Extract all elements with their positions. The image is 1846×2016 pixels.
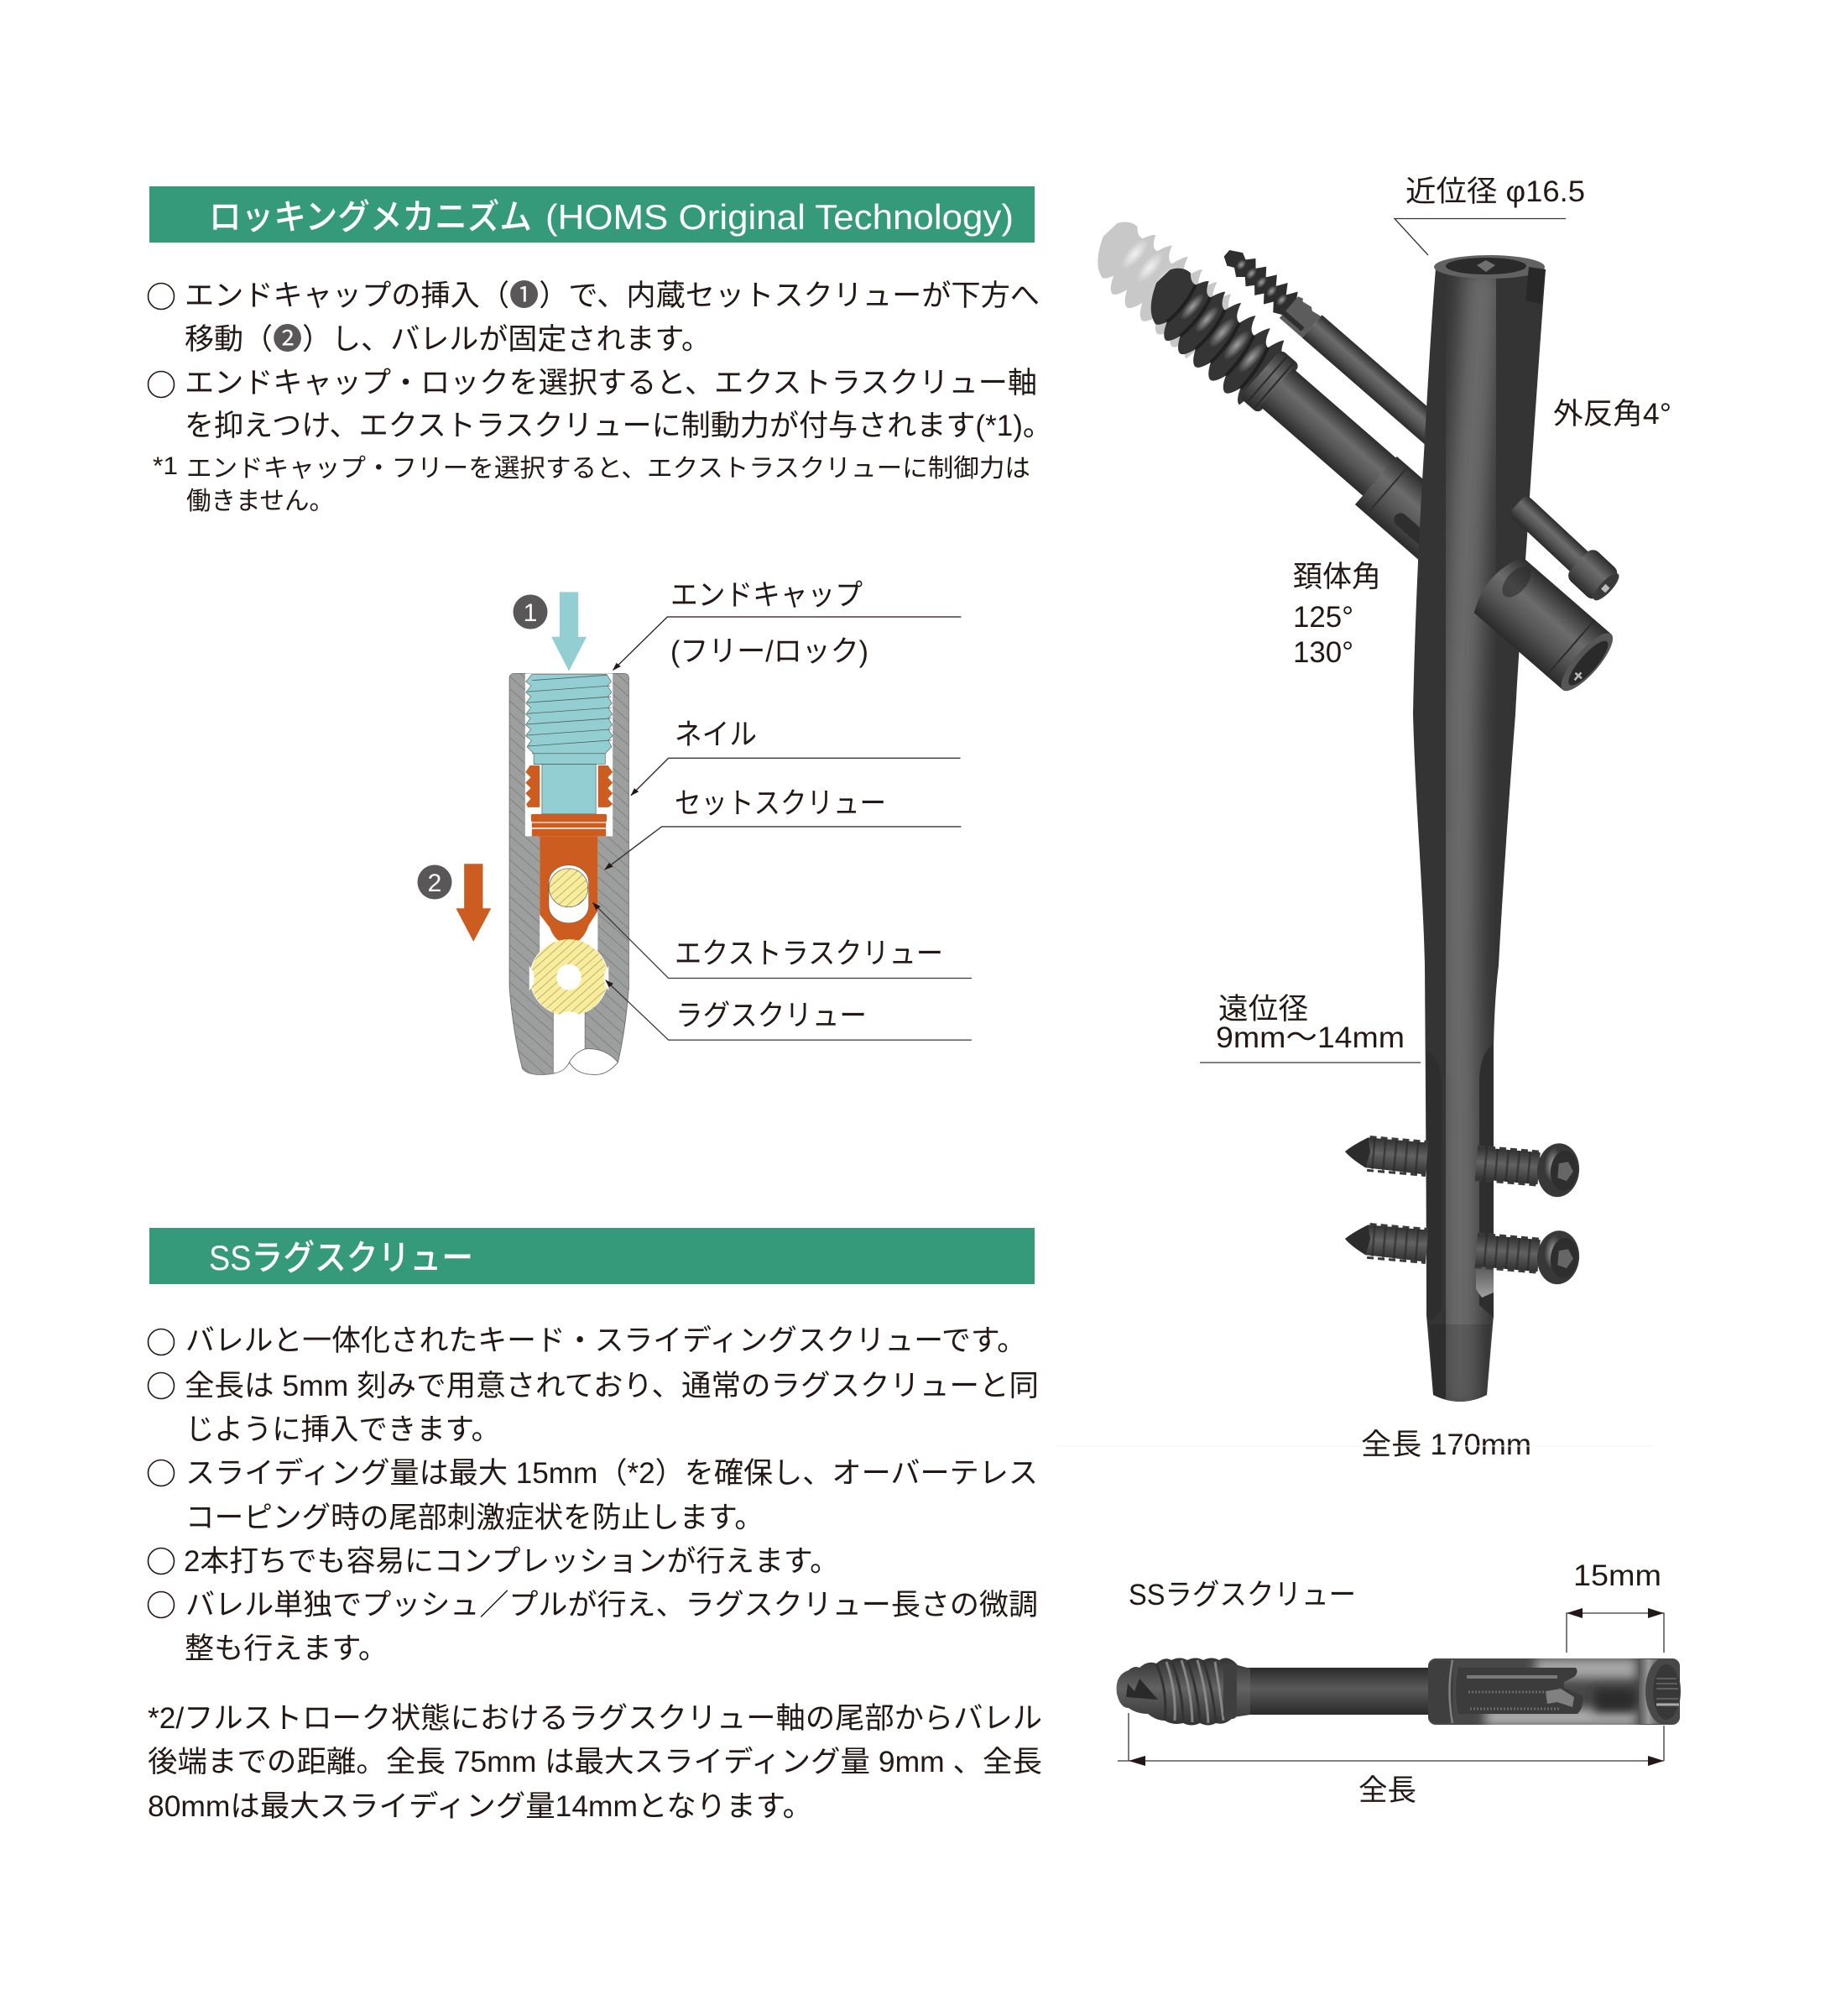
label: neck shaft angle: 130° bbox=[1293, 636, 1353, 669]
bullet text: end cap insertion: 移動（❷）し、バレルが固定されます。 bbox=[185, 323, 711, 356]
label: proximal diameter: 近位径 φ16.5 bbox=[1405, 175, 1585, 208]
nail distal slot highlight bbox=[1476, 1262, 1494, 1298]
distal locking screw 1 bbox=[1343, 1125, 1582, 1199]
label: set screw: セットスクリュー bbox=[675, 787, 886, 820]
leader: end cap bbox=[613, 617, 961, 670]
extra screw section bbox=[549, 869, 588, 907]
footnote *1 bbox=[153, 452, 1030, 515]
diagram: locking mechanism cross-section bbox=[418, 579, 972, 1074]
heading banner: locking mechanism: ロッキングメカニズム bbox=[209, 197, 532, 237]
label: valgus angle: 外反角4° bbox=[1553, 398, 1671, 431]
end cap bbox=[525, 675, 613, 814]
label: SS lag screw: SSラグスクリュー bbox=[1129, 1579, 1356, 1611]
bullet text: push pull: 整も行えます。 bbox=[185, 1632, 388, 1665]
bullet text: sliding amount: スライディング量は最大 15mm（*2）を確保し、オーバーテレス bbox=[185, 1457, 1038, 1490]
label: extra screw: エクストラスクリュー bbox=[675, 937, 943, 970]
footnote *2: 後端までの距離。全長 75mm は最大スライディング量 9mm 、全長 bbox=[148, 1746, 1042, 1778]
heading banner: SS lag screw: SSラグスクリュー bbox=[209, 1238, 473, 1277]
bullet text: end cap insertion: エンドキャップの挿入（❶）で、内蔵セットスクリューが下方へ bbox=[185, 279, 1040, 312]
nail body bbox=[1413, 259, 1546, 1410]
bullet text: end cap lock: を抑えつけ、エクストラスクリューに制動力が付与されます(*1)。 bbox=[185, 410, 1052, 442]
label: proximal diameter bbox=[1395, 175, 1585, 255]
lag barrel exit bbox=[1468, 551, 1620, 697]
footnote *1: エンドキャップ・フリーを選択すると、エクストラスクリューに制御力は bbox=[186, 455, 1030, 483]
arrow: end cap down bbox=[551, 592, 587, 671]
dimension: total length bbox=[1118, 1713, 1664, 1807]
nail top opening bbox=[1434, 255, 1546, 304]
footnote *1: *1 bbox=[153, 452, 178, 480]
bullet text: compression: 2本打ちでも容易にコンプレッションが行えます。 bbox=[184, 1545, 839, 1578]
label: free / lock: (フリー/ロック) bbox=[670, 635, 868, 668]
bullet text: length increments: じように挿入できます。 bbox=[185, 1413, 500, 1446]
lag screw upper part bbox=[1132, 253, 1488, 577]
distal locking screw 2 bbox=[1343, 1212, 1582, 1286]
footnote *2: 80mmは最大スライディング量14mmとなります。 bbox=[148, 1790, 812, 1823]
lag screw shaft bbox=[1260, 368, 1400, 500]
ghost lag screw thread bbox=[1078, 206, 1238, 360]
panel: locking mechanism text bbox=[148, 186, 1052, 515]
footnote *2 bbox=[148, 1702, 1042, 1823]
bullet text: push pull bbox=[148, 1589, 1038, 1665]
step badge 2: 2 bbox=[428, 870, 441, 897]
panel: SS lag screw text bbox=[148, 1228, 1042, 1823]
small extra screw upper part bbox=[1218, 240, 1453, 452]
leader: lag screw bbox=[606, 980, 972, 1040]
extra screw exit bbox=[1504, 489, 1624, 606]
heading banner: SS lag screw bbox=[149, 1228, 1035, 1284]
arrow: set screw down bbox=[456, 864, 491, 942]
illustration: intramedullary nail with screws bbox=[1078, 206, 1624, 1410]
SS barrel window bbox=[1456, 1668, 1583, 1714]
bullet text: end cap insertion bbox=[148, 279, 1040, 356]
bullet text: end cap lock bbox=[148, 367, 1052, 442]
section drawing bbox=[456, 592, 972, 1074]
bullet text: sliding amount bbox=[148, 1457, 1038, 1534]
SS barrel bbox=[1428, 1658, 1681, 1726]
lag barrel bbox=[1355, 457, 1479, 576]
label: distal diameter bbox=[1200, 993, 1421, 1063]
bullet text: end cap lock: エンドキャップ・ロックを選択すると、エクストラスクリュー軸 bbox=[185, 367, 1037, 400]
leader: extra screw bbox=[593, 903, 972, 978]
label: distal diameter: 遠位径 bbox=[1218, 993, 1308, 1026]
dimension: 15mm bbox=[1567, 1559, 1664, 1653]
footnote *2: *2/フルストローク状態におけるラグスクリュー軸の尾部からバレル bbox=[148, 1702, 1042, 1735]
heading banner: locking mechanism: (HOMS Original Technology) bbox=[545, 197, 1014, 237]
SS barrel end opening bbox=[1639, 1659, 1664, 1724]
nail distal grooves bbox=[1426, 1045, 1494, 1322]
label: neck shaft angle: 頚体角 bbox=[1293, 561, 1381, 593]
footnote *1: 働きません。 bbox=[186, 488, 334, 515]
leader: nail bbox=[631, 758, 961, 796]
nail wall bbox=[509, 673, 628, 1074]
bullet text: sliding amount: コーピング時の尾部刺激症状を防止します。 bbox=[185, 1502, 764, 1534]
lag screw collar bbox=[1239, 349, 1300, 414]
SS shaft bbox=[1232, 1668, 1430, 1715]
SS thread bbox=[1117, 1658, 1250, 1726]
label: distal diameter: 9mm〜14mm bbox=[1216, 1021, 1405, 1054]
label: total length 170mm: 全長 170mm bbox=[1361, 1428, 1531, 1461]
illustration: SS lag screw bbox=[1117, 1559, 1681, 1807]
label: nail: ネイル bbox=[675, 718, 757, 751]
leader: set screw bbox=[605, 827, 961, 870]
nail inner channel bbox=[525, 673, 613, 978]
label: neck shaft angle bbox=[1293, 561, 1381, 669]
step badge 1 bbox=[514, 594, 547, 629]
label: lag screw: ラグスクリュー bbox=[675, 1000, 867, 1032]
nail tip shading bbox=[1430, 1324, 1490, 1402]
bullet text: length increments: 全長は 5mm 刻みで用意されており、通常のラグスクリューと同 bbox=[185, 1370, 1039, 1402]
heading banner: locking mechanism bbox=[149, 186, 1035, 243]
lag screw section bbox=[530, 939, 608, 1016]
bullet text: one-piece barrel: バレルと一体化されたキード・スライディングスクリューです。 bbox=[185, 1324, 1026, 1357]
bullet text: length increments bbox=[148, 1370, 1039, 1446]
set screw bbox=[525, 765, 540, 807]
step badge 1: 1 bbox=[524, 599, 537, 627]
label: end cap: エンドキャップ bbox=[670, 579, 863, 612]
label: neck shaft angle: 125° bbox=[1293, 601, 1353, 634]
step badge 2 bbox=[418, 864, 451, 900]
dimension: total length: 全長 bbox=[1358, 1774, 1416, 1807]
bullet text: push pull: バレル単独でプッシュ／プルが行え、ラグスクリュー長さの微調 bbox=[185, 1589, 1038, 1622]
dimension: 15mm: 15mm bbox=[1573, 1559, 1661, 1592]
